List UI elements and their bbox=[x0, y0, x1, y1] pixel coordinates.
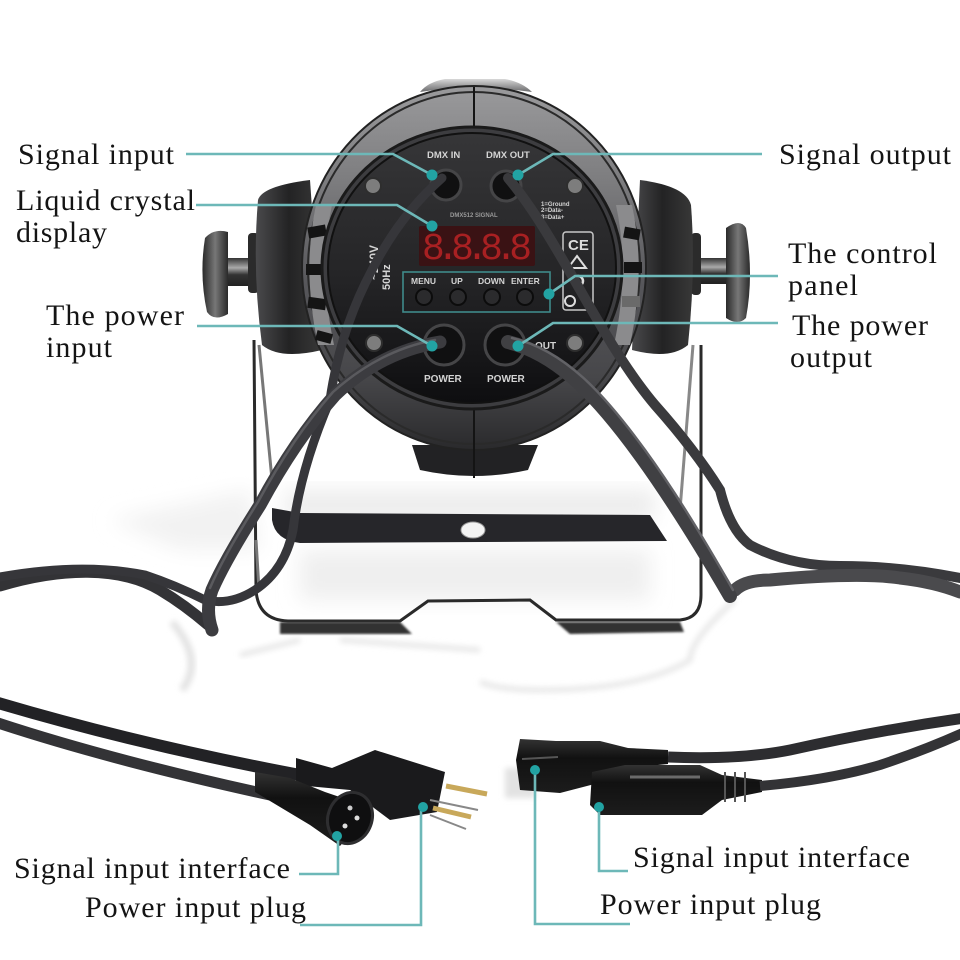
left signal connector bbox=[255, 772, 380, 850]
panel sockets bbox=[424, 170, 525, 365]
cross bar bbox=[272, 508, 667, 543]
leader: right signal interface bbox=[594, 802, 628, 871]
leader: control panel bbox=[544, 276, 778, 300]
leader: left signal interface bbox=[299, 831, 342, 874]
label: the power input bbox=[46, 299, 184, 364]
panel buttons: MENU bbox=[411, 276, 436, 286]
label: the power output: The power bbox=[792, 309, 928, 342]
lamp body shell bbox=[302, 79, 646, 478]
DMX labels: POWER bbox=[487, 374, 526, 385]
floor shadows bbox=[110, 490, 735, 798]
DMX labels: 50Hz bbox=[381, 264, 393, 290]
leader: power output bbox=[512, 323, 778, 352]
leader: left power plug bbox=[300, 802, 428, 925]
DMX labels: 3=Data+ bbox=[541, 215, 565, 221]
panel buttons bbox=[403, 272, 550, 312]
DMX labels: DMX IN bbox=[427, 150, 460, 161]
DMX labels: 2=Data- bbox=[541, 208, 563, 214]
label: liquid crystal display: display bbox=[16, 216, 107, 249]
DMX labels: POWER bbox=[424, 374, 463, 385]
panel buttons: ENTER bbox=[511, 276, 540, 286]
panel buttons: UP bbox=[451, 276, 463, 286]
leader: liquid crystal display bbox=[196, 205, 438, 232]
leader: power input bbox=[197, 326, 438, 352]
label: left power input plug: Power input plug bbox=[85, 891, 306, 924]
control panel disc bbox=[328, 133, 616, 403]
vent ribs left bbox=[306, 205, 334, 345]
screws bbox=[365, 178, 583, 351]
panel buttons: DOWN bbox=[478, 276, 505, 286]
label: liquid crystal display: Liquid crystal bbox=[16, 184, 195, 217]
bar hole bbox=[461, 522, 485, 538]
label: the power input: input bbox=[46, 331, 113, 364]
label: the power output bbox=[790, 309, 928, 374]
label: signal output: Signal output bbox=[779, 138, 952, 171]
label: right signal input interface: Signal input interface bbox=[633, 841, 910, 874]
left knob and side block bbox=[202, 180, 322, 354]
label: the control panel bbox=[788, 237, 937, 302]
yoke stand bbox=[254, 340, 701, 634]
lower right cables bbox=[668, 718, 960, 786]
cables to left bbox=[0, 178, 442, 630]
certification box: CE bbox=[568, 237, 589, 254]
label: the control panel: panel bbox=[788, 269, 858, 302]
LED display: 8.8.8.8 bbox=[422, 228, 532, 271]
label: left signal input interface: Signal input interface bbox=[14, 852, 290, 885]
label: the control panel: The control bbox=[788, 237, 937, 270]
certification box bbox=[563, 232, 593, 310]
DMX labels: DMX OUT bbox=[486, 150, 530, 161]
leader: signal output bbox=[512, 154, 762, 180]
leader: right power plug bbox=[530, 765, 630, 924]
label: right power input plug: Power input plug bbox=[600, 888, 821, 921]
label: liquid crystal display bbox=[16, 184, 195, 249]
bottom tab bbox=[412, 445, 538, 476]
DMX labels bbox=[367, 150, 570, 385]
right knob and side block bbox=[632, 180, 750, 354]
vent ribs right bbox=[614, 205, 642, 345]
cables to right bbox=[508, 178, 960, 596]
lower left cables bbox=[0, 702, 300, 795]
label: the power input: The power bbox=[46, 299, 184, 332]
DMX labels: ~240V bbox=[367, 245, 381, 280]
DMX labels: DMX512 SIGNAL bbox=[450, 213, 498, 219]
right signal connector bbox=[590, 765, 762, 815]
DMX labels: 1=Ground bbox=[541, 202, 570, 208]
DMX labels: OUT bbox=[535, 341, 556, 352]
label: the power output: output bbox=[790, 341, 873, 374]
label: signal input: Signal input bbox=[18, 138, 175, 171]
right power connector bbox=[516, 739, 668, 793]
leader: signal input bbox=[186, 154, 438, 180]
top cap bbox=[420, 79, 532, 92]
left power plug bbox=[296, 750, 487, 829]
